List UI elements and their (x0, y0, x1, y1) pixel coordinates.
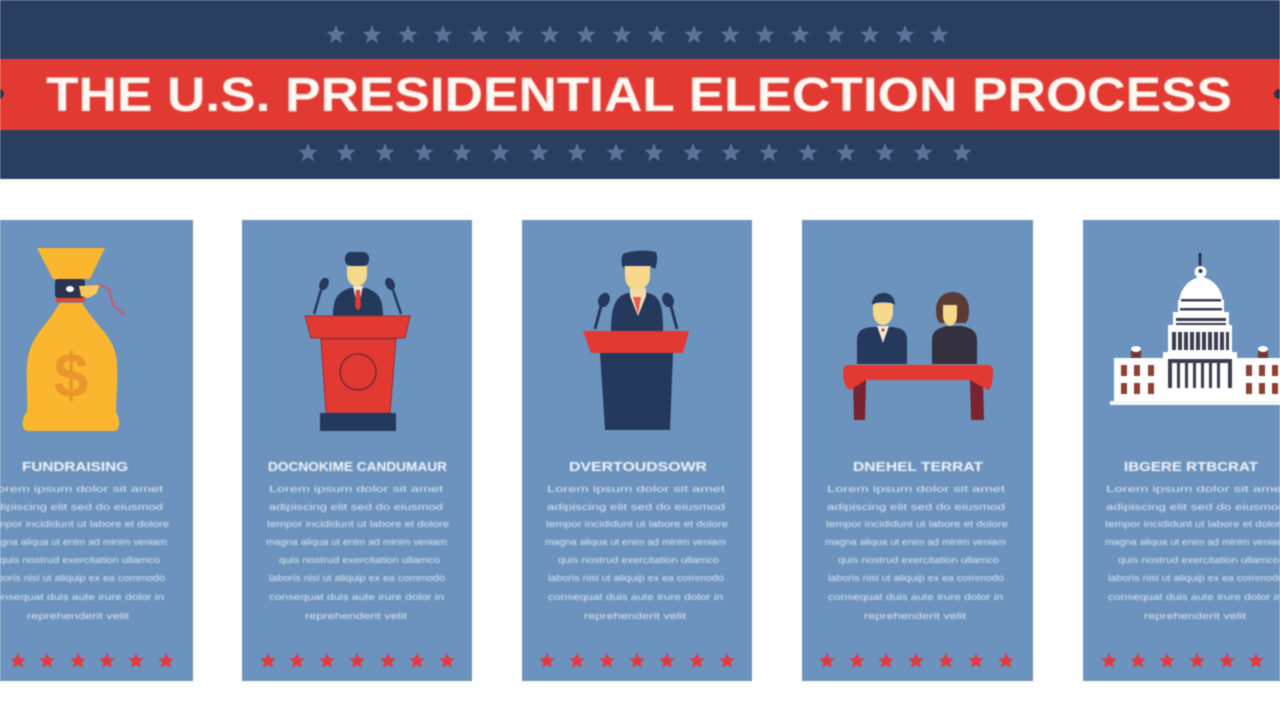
body text: tempor incididunt ut labore et dolore (1105, 519, 1280, 530)
heading: FUNDRAISING (22, 460, 128, 474)
body text (825, 484, 1008, 622)
body text: laboris nisi ut aliquip ex ea commodo (269, 573, 445, 584)
body text: consequat duis aute irure dolor in (548, 592, 723, 603)
panel: primary campaign (242, 220, 472, 681)
body text: reprehenderit velit (27, 611, 129, 622)
body text: reprehenderit velit (864, 611, 966, 622)
panel: debate (802, 220, 1033, 681)
panel: convention (522, 220, 752, 681)
body text: Lorem ipsum dolor sit amet (827, 484, 1006, 495)
icon: money bag (23, 248, 125, 431)
icon: podium with speaker (305, 252, 410, 431)
body text: reprehenderit velit (305, 611, 407, 622)
star row (819, 652, 1014, 668)
heading: DNEHEL TERRAT (853, 460, 983, 474)
panel: inauguration (1083, 220, 1280, 681)
star row (260, 652, 455, 668)
body text: consequat duis aute irure dolor in (269, 592, 444, 603)
bottom star row (298, 143, 972, 161)
body text (266, 484, 449, 622)
body text: quis nostrud exercitation ullamco (838, 555, 999, 566)
body text: Lorem ipsum dolor sit amet (1106, 484, 1280, 495)
body text: tempor incididunt ut labore et dolore (267, 519, 449, 530)
body text: quis nostrud exercitation ullamco (1118, 555, 1279, 566)
body text: adipiscing elit sed do eiusmod (1106, 502, 1280, 513)
body text: Lorem ipsum dolor sit amet (269, 484, 444, 495)
star row (1101, 652, 1264, 668)
icon: lectern with speaker (583, 251, 689, 430)
heading: IBGERE RTBCRAT (1124, 460, 1258, 474)
body text: magna aliqua ut enim ad minim veniam (1105, 537, 1280, 548)
heading: DVERTOUDSOWR (569, 460, 707, 474)
body text: laboris nisi ut aliquip ex ea commodo (1108, 573, 1280, 584)
body text: laboris nisi ut aliquip ex ea commodo (828, 573, 1004, 584)
body text (0, 484, 169, 622)
red title ribbon (0, 59, 1280, 130)
title: THE U.S. PRESIDENTIAL ELECTION PROCESS (46, 69, 1232, 122)
body text: Lorem ipsum dolor sit amet (547, 484, 726, 495)
ribbon rivets (0, 89, 1280, 99)
body text: magna aliqua ut enim ad minim veniam (825, 537, 1006, 548)
body text: quis nostrud exercitation ullamco (279, 555, 440, 566)
body text (1105, 484, 1280, 622)
body text: quis nostrud exercitation ullamco (0, 555, 160, 566)
body text: adipiscing elit sed do eiusmod (269, 502, 443, 513)
body text: adipiscing elit sed do eiusmod (547, 502, 725, 513)
body text: magna aliqua ut enim ad minim veniam (545, 537, 726, 548)
icon: money bag: $ (54, 342, 88, 411)
body text: laboris nisi ut aliquip ex ea commodo (548, 573, 724, 584)
heading: DOCNOKIME CANDUMAUR (268, 460, 447, 474)
body text: reprehenderit velit (584, 611, 686, 622)
body text: reprehenderit velit (1144, 611, 1246, 622)
body text: consequat duis aute irure dolor in (1108, 592, 1280, 603)
body text: adipiscing elit sed do eiusmod (827, 502, 1005, 513)
panel: fundraising (0, 220, 193, 681)
star row (10, 652, 174, 668)
body text: magna aliqua ut enim ad minim veniam (266, 537, 447, 548)
body text: tempor incididunt ut labore et dolore (546, 519, 728, 530)
header banner (0, 0, 1280, 179)
body text: consequat duis aute irure dolor in (828, 592, 1003, 603)
body text: tempor incididunt ut labore et dolore (826, 519, 1008, 530)
star row (539, 652, 735, 668)
top star row (326, 25, 948, 43)
body text (545, 484, 728, 622)
icon: capitol building (1110, 253, 1280, 405)
icon: candidates at table (843, 292, 993, 420)
body text: quis nostrud exercitation ullamco (558, 555, 719, 566)
